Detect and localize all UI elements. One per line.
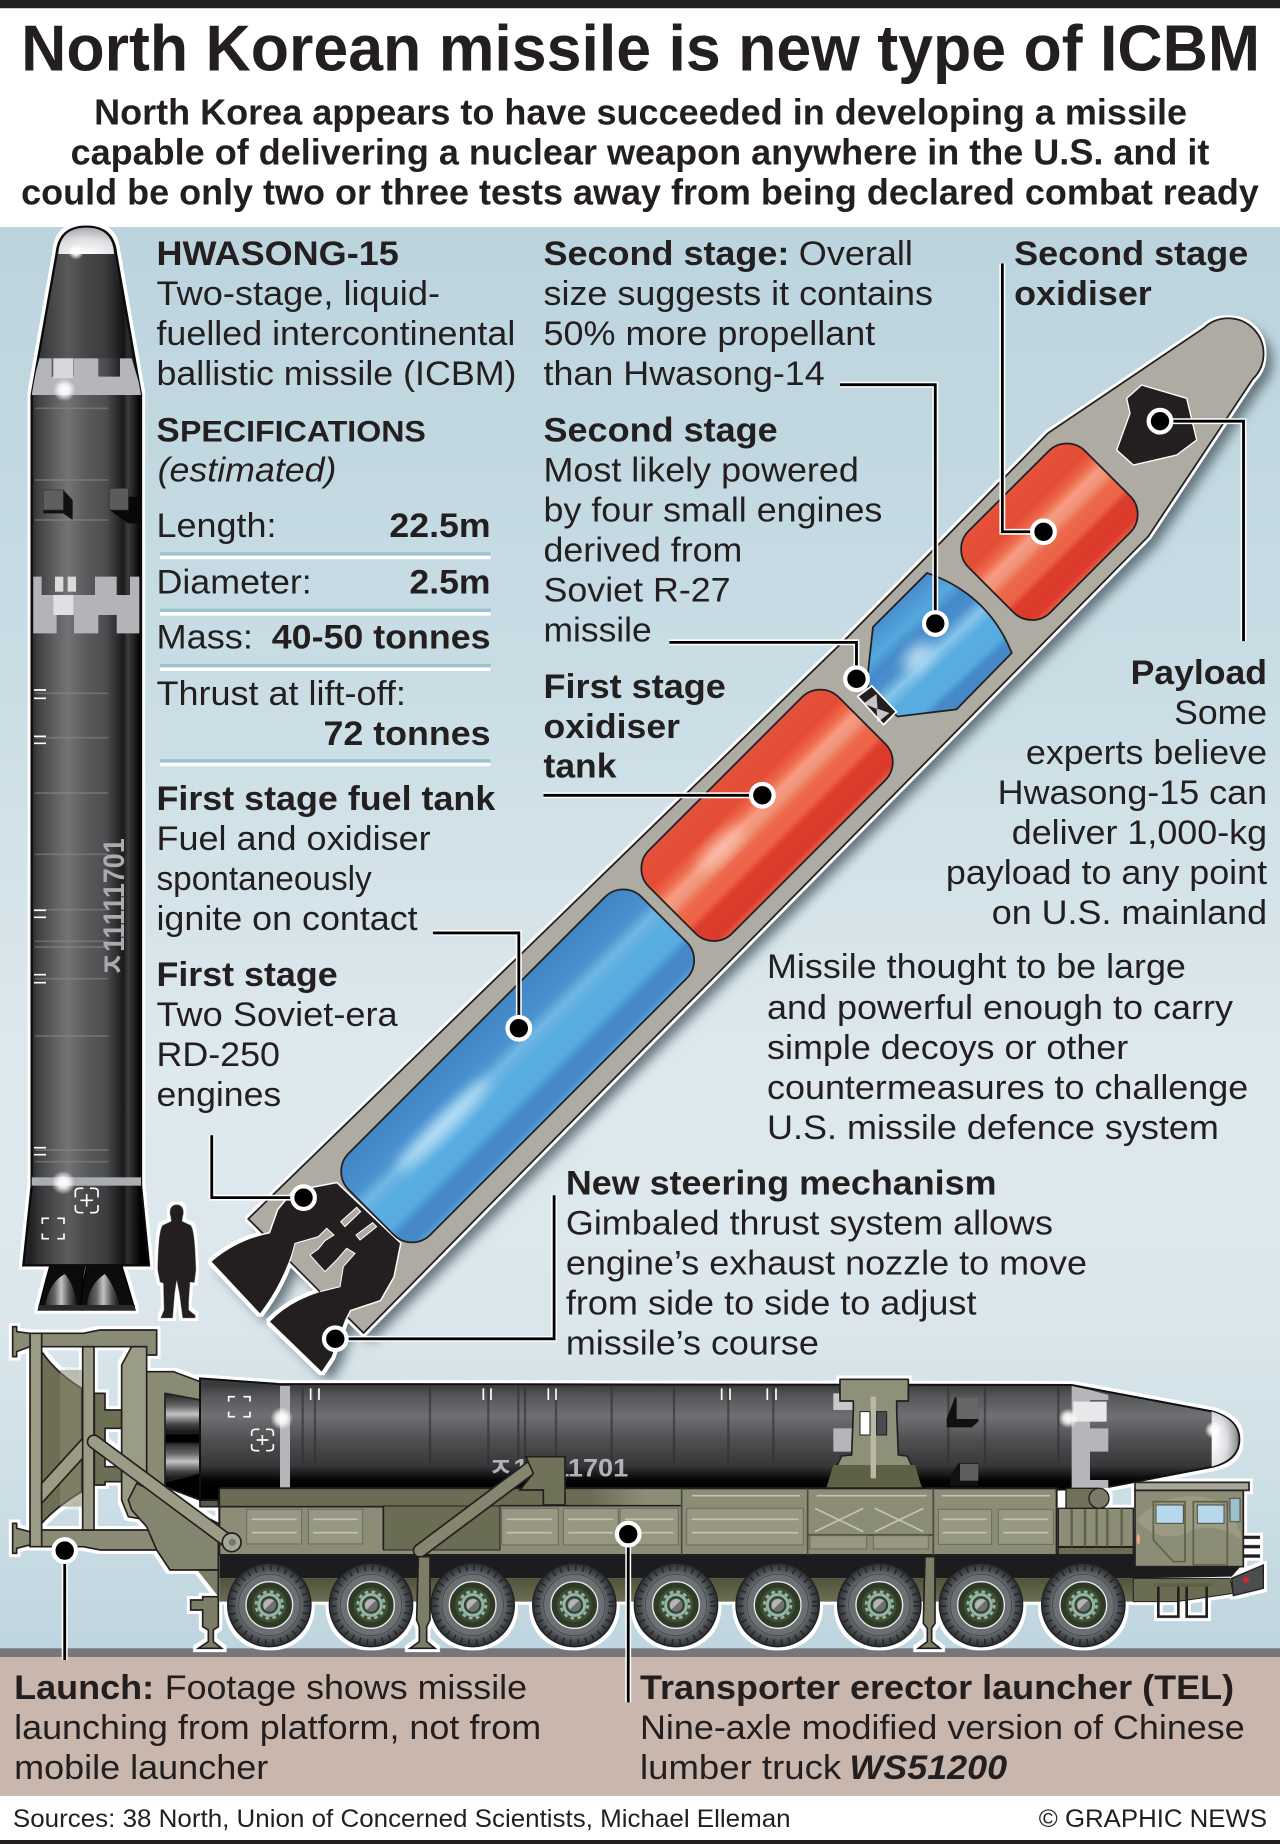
launch platform xyxy=(13,1327,218,1570)
text: decoys: U.S. missile defence system xyxy=(767,1109,1219,1147)
text: payload: deliver 1,000-kg xyxy=(1012,814,1267,852)
lower chassis xyxy=(219,1553,1134,1602)
first stage oxidiser tank xyxy=(631,679,903,952)
text: first stage fuel tank: spontaneously xyxy=(156,860,372,898)
specifications table: Mass: xyxy=(156,619,253,657)
vertical missile serial number: ㅈ11111701 xyxy=(98,838,131,977)
vertical missile nozzles xyxy=(38,1265,135,1311)
text: launch: mobile launcher xyxy=(14,1749,268,1787)
truck wheels xyxy=(228,1563,1125,1647)
text: first stage fuel tank: First stage fuel tank xyxy=(156,780,496,818)
text: second stage size: Overall xyxy=(799,235,913,273)
text: payload: on U.S. mainland xyxy=(992,894,1267,932)
truck cargo body xyxy=(219,1488,1057,1555)
text: new steering mechanism: from side to side to adjust xyxy=(566,1284,977,1322)
text: Hwasong-15 description: Two-stage, liquid- xyxy=(156,275,440,313)
text: Hwasong-15 description xyxy=(156,235,516,393)
casing xyxy=(248,318,1264,1333)
text: first stage fuel tank: ignite on contact xyxy=(156,900,418,938)
text: payload: experts believe xyxy=(1026,734,1267,772)
arm mount block xyxy=(520,1457,565,1505)
subtitle xyxy=(21,92,1260,213)
leader: first stage oxidiser tank xyxy=(544,793,762,798)
footer rule xyxy=(0,1840,1280,1844)
human figure for scale xyxy=(158,1205,196,1318)
text: second stage oxidiser: Second stage xyxy=(1014,235,1248,273)
text: decoys: Missile thought to be large xyxy=(767,948,1186,986)
text: transporter erector launcher: lumber truck xyxy=(640,1749,842,1787)
forward missile cradle xyxy=(827,1379,922,1487)
vertical missile side view xyxy=(20,227,196,1318)
leader: second stage propellant xyxy=(840,385,935,624)
erector arm xyxy=(94,1442,530,1552)
second stage small engines xyxy=(858,686,896,725)
text: transporter erector launcher: Transporter erector launcher (TEL) xyxy=(640,1669,1234,1707)
text: specifications heading: PECIFICATIONS xyxy=(180,416,426,449)
text: launch: Launch: xyxy=(14,1669,154,1707)
truck cab xyxy=(1133,1482,1263,1617)
text: payload: Hwasong-15 can xyxy=(998,774,1267,812)
text: second stage engines: Second stage xyxy=(544,412,778,450)
specifications table: 40-50 tonnes xyxy=(272,619,491,657)
text: second stage engines xyxy=(544,412,882,650)
text: second stage size: 50% more propellant xyxy=(544,315,876,353)
text: second stage size xyxy=(544,235,933,393)
second stage oxidiser tank xyxy=(950,433,1148,631)
text: Hwasong-15 description: ballistic missile (ICBM) xyxy=(156,355,516,393)
text: launch: Footage shows missile xyxy=(165,1669,527,1707)
rocket engines xyxy=(212,1183,400,1372)
vertical missile markings xyxy=(20,227,153,1266)
text: specifications heading xyxy=(156,412,426,490)
text: second stage engines: missile xyxy=(544,612,652,650)
text: payload xyxy=(946,654,1267,932)
leader: transporter erector launcher xyxy=(626,1534,631,1702)
vertical missile body xyxy=(23,227,149,1265)
text: second stage engines: Most likely powered xyxy=(544,452,859,490)
leader: second stage oxidiser xyxy=(1002,264,1044,532)
text: specifications heading: S xyxy=(156,412,180,450)
payload warhead xyxy=(1117,385,1197,465)
text: second stage engines: Soviet R-27 xyxy=(544,572,731,610)
text: second stage oxidiser: oxidiser xyxy=(1014,275,1152,313)
text: payload: Some xyxy=(1174,694,1267,732)
text: first stage: RD-250 xyxy=(156,1036,280,1074)
leader: first stage fuel tank xyxy=(433,933,519,1028)
text: first stage: First stage xyxy=(156,956,338,994)
ground strip xyxy=(0,1648,1280,1657)
title: North Korean missile is new type of ICBM xyxy=(21,12,1260,85)
cutaway casing and engines xyxy=(212,318,1264,1372)
panel: bottom caption background xyxy=(0,1657,1280,1796)
text: first stage oxidiser tank xyxy=(544,668,726,786)
text: second stage size: size suggests it contains xyxy=(544,275,933,313)
second stage fuel tank xyxy=(868,573,1012,716)
text: second stage size: Second stage: xyxy=(544,235,789,273)
sources: Sources: 38 North, Union of Concerned Scientists, Michael Elleman xyxy=(13,1805,791,1833)
missile serial number on transporter: ㅈ11111701 xyxy=(488,1455,628,1483)
subtitle: North Korea appears to have succeeded in developing a missile xyxy=(94,92,1187,133)
specifications table xyxy=(156,507,491,766)
engine compartment xyxy=(1058,1488,1133,1555)
subtitle: could be only two or three tests away from being declared combat ready xyxy=(21,172,1260,213)
text: second stage engines: derived from xyxy=(544,532,742,570)
leader: second stage engines xyxy=(669,642,856,679)
diagonal cutaway missile xyxy=(212,318,1264,1372)
text: first stage fuel tank xyxy=(156,780,496,938)
text: decoys: simple decoys or other xyxy=(767,1029,1128,1067)
horizontal missile on transporter xyxy=(200,1378,1239,1500)
leader: launch platform xyxy=(62,1551,67,1660)
specifications table: Diameter: xyxy=(156,563,312,601)
text: decoys: countermeasures to challenge xyxy=(767,1069,1248,1107)
stabiliser jacks xyxy=(191,1557,940,1648)
text: new steering mechanism: missile’s course xyxy=(566,1324,819,1362)
first stage fuel tank xyxy=(330,879,705,1253)
text: second stage size: than Hwasong-14 xyxy=(544,355,825,393)
specifications table: Thrust at lift-off: xyxy=(156,675,406,713)
text: first stage oxidiser tank: oxidiser xyxy=(544,708,680,746)
text: first stage: engines xyxy=(156,1076,281,1114)
text: first stage xyxy=(156,956,398,1114)
text: new steering mechanism: New steering mechanism xyxy=(566,1164,996,1202)
text: decoys: and powerful enough to carry xyxy=(767,989,1234,1027)
text: decoys xyxy=(767,948,1248,1147)
specifications table: 22.5m xyxy=(389,507,491,545)
text: Hwasong-15 description: HWASONG-15 xyxy=(156,235,399,273)
leader: payload xyxy=(1160,421,1244,641)
text: second stage engines: by four small engines xyxy=(544,492,882,530)
subtitle: capable of delivering a nuclear weapon anywhere in the U.S. and it xyxy=(71,132,1209,173)
text: first stage fuel tank: Fuel and oxidiser xyxy=(156,820,431,858)
specifications table: 2.5m xyxy=(409,563,491,601)
text: new steering mechanism: engine’s exhaust nozzle to move xyxy=(566,1244,1087,1282)
text: transporter erector launcher xyxy=(640,1669,1245,1787)
panel: sky background xyxy=(0,227,1280,1648)
text: payload: Payload xyxy=(1131,654,1267,692)
text: Hwasong-15 description: fuelled intercontinental xyxy=(156,315,515,353)
text: transporter erector launcher: Nine-axle modified version of Chinese xyxy=(640,1709,1245,1747)
launcher and transporter vehicle xyxy=(13,1327,1263,1648)
text: specifications heading: (estimated) xyxy=(158,452,336,490)
callout dots xyxy=(53,410,1171,1562)
text: launch: launching from platform, not from xyxy=(14,1709,541,1747)
leader: steering mechanism xyxy=(335,1195,554,1339)
leader: first stage engines xyxy=(212,1135,304,1198)
top rule xyxy=(0,0,1280,8)
text: payload: payload to any point xyxy=(946,854,1267,892)
text: first stage oxidiser tank: tank xyxy=(544,748,617,786)
specifications table: 72 tonnes xyxy=(324,715,491,753)
text: new steering mechanism: Gimbaled thrust system allows xyxy=(566,1204,1053,1242)
specifications table: Length: xyxy=(156,507,276,545)
text: second stage oxidiser xyxy=(1014,235,1248,313)
text: new steering mechanism xyxy=(566,1164,1087,1362)
copyright: © GRAPHIC NEWS xyxy=(1039,1805,1267,1833)
text: launch xyxy=(14,1669,541,1787)
text: first stage: Two Soviet-era xyxy=(156,996,398,1034)
text: first stage oxidiser tank: First stage xyxy=(544,668,726,706)
text: transporter erector launcher: WS51200 xyxy=(849,1749,1007,1787)
